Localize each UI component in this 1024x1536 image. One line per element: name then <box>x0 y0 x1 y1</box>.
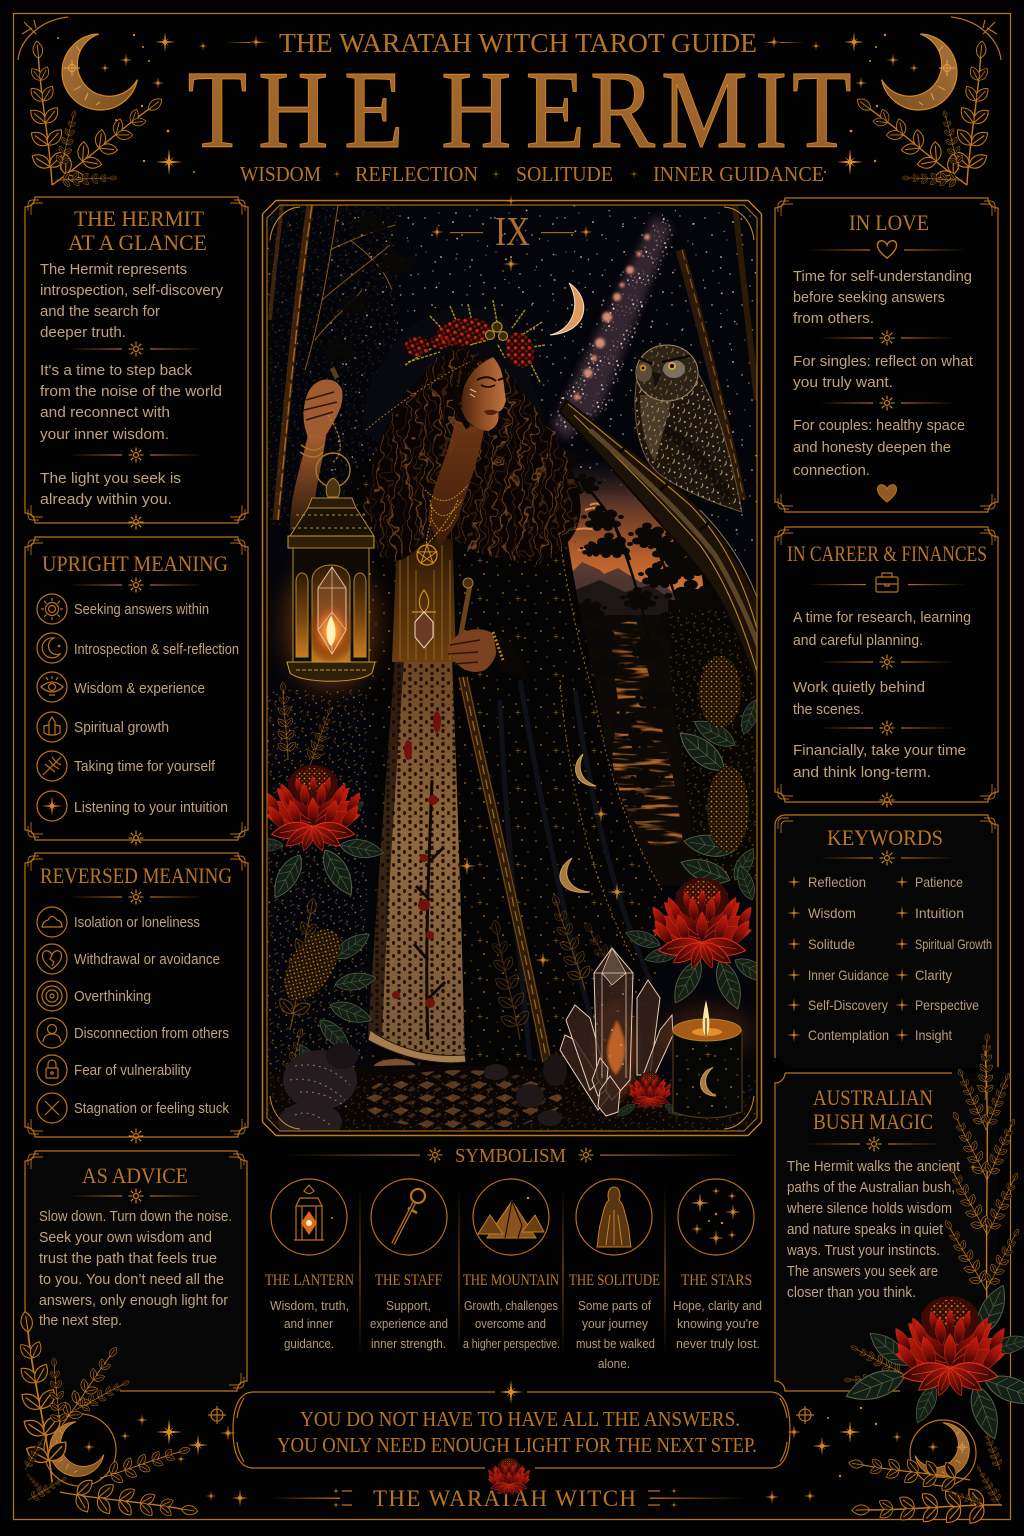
flower crown <box>405 300 545 382</box>
icon: briefcase <box>808 573 966 592</box>
icon: heart outline <box>808 241 966 258</box>
owl <box>633 345 742 512</box>
panel: in love <box>775 198 998 512</box>
body text <box>40 262 224 508</box>
symbol names <box>265 1272 752 1289</box>
lantern <box>285 453 377 689</box>
quote text: YOU ONLY NEED ENOUGH LIGHT FOR THE NEXT STEP. <box>277 1433 757 1457</box>
quote banner <box>233 1380 790 1468</box>
keyword list <box>787 874 992 1043</box>
keyword list: Reflection <box>808 874 866 890</box>
keyword tagline <box>240 162 824 186</box>
body text: and careful planning. <box>793 633 923 649</box>
distant mountains <box>572 562 678 615</box>
symbol descriptions: guidance. <box>284 1336 334 1351</box>
quote text: YOU DO NOT HAVE TO HAVE ALL THE ANSWERS. <box>300 1407 740 1431</box>
heading <box>813 1085 933 1134</box>
heading: THE HERMIT <box>74 206 205 231</box>
large corner waratah <box>842 1281 1024 1443</box>
icon: staff <box>371 1179 447 1255</box>
bush magic body text: ways. Trust your instincts. <box>786 1243 940 1259</box>
keyword list: Intuition <box>915 905 964 921</box>
heading: BUSH MAGIC <box>813 1109 933 1134</box>
foot and sandal <box>374 1059 421 1066</box>
body text: your inner wisdom. <box>40 427 169 443</box>
keyword tagline: SOLITUDE <box>516 162 613 186</box>
sunset sky <box>568 464 704 593</box>
keyword list: Perspective <box>915 997 979 1013</box>
card numeral: IX <box>495 208 530 254</box>
winding river path <box>612 620 684 850</box>
body text <box>39 1209 232 1329</box>
chest and neck <box>425 420 484 548</box>
icon: person <box>37 1018 67 1048</box>
symbol names: THE MOUNTAIN <box>463 1272 559 1289</box>
keyword tagline: INNER GUIDANCE <box>653 162 824 186</box>
symbol descriptions <box>270 1298 762 1371</box>
symbol descriptions: experience and <box>370 1316 448 1331</box>
body text: The light you seek is <box>40 471 181 487</box>
card numeral <box>430 208 592 272</box>
body text: Seek your own wisdom and <box>39 1230 212 1246</box>
symbol descriptions: Wisdom, truth, <box>270 1298 349 1313</box>
left forest trees <box>268 205 398 525</box>
small waratah <box>615 1072 685 1119</box>
body text <box>793 269 973 479</box>
hair front locks <box>385 360 576 561</box>
icon: broken heart <box>37 944 67 974</box>
reversed list: Stagnation or feeling stuck <box>74 1101 230 1117</box>
icon: eye <box>37 672 67 702</box>
sunset clouds <box>576 502 600 551</box>
body text <box>793 610 971 781</box>
symbol descriptions: Growth, challenges <box>464 1298 558 1313</box>
tarot card illustration <box>252 195 775 1142</box>
body text: from the noise of the world <box>40 384 222 400</box>
body text: It's a time to step back <box>40 363 193 379</box>
left golden foliage <box>268 682 367 1074</box>
body text: you truly want. <box>793 375 893 391</box>
main title: THE HERMIT <box>188 48 852 171</box>
face <box>454 355 506 431</box>
left waratah <box>268 765 384 898</box>
bottom right ornament <box>765 1406 1006 1531</box>
symbol names: THE STAFF <box>375 1272 442 1289</box>
forest floor <box>267 1065 757 1136</box>
right forest trees <box>680 205 757 500</box>
upright list: Wisdom & experience <box>74 681 205 697</box>
keyword tagline: REFLECTION <box>355 162 478 186</box>
bottom left ornament <box>1 1308 248 1531</box>
symbol descriptions: Hope, clarity and <box>673 1298 762 1313</box>
symbolism section <box>265 1145 762 1371</box>
body text: already within you. <box>40 492 172 508</box>
body text: For singles: reflect on what <box>793 354 973 370</box>
heading: UPRIGHT MEANING <box>42 551 228 576</box>
symbol descriptions: knowing you're <box>677 1316 759 1331</box>
top right ornament: moon and sprigs <box>812 17 1002 200</box>
keyword list: Wisdom <box>808 905 856 921</box>
panel: upright meaning <box>25 537 248 846</box>
icon: hooded figure <box>576 1179 652 1255</box>
rocks <box>278 1043 567 1130</box>
keyword list: Solitude <box>808 936 855 952</box>
cloak <box>352 430 663 1077</box>
body text: answers, only enough light for <box>39 1293 228 1309</box>
body text: before seeking answers <box>793 290 945 306</box>
header <box>188 27 852 186</box>
symbol descriptions: Some parts of <box>578 1298 651 1313</box>
body text: introspection, self-discovery <box>40 283 224 299</box>
brand name: THE WARATAH WITCH <box>373 1486 636 1511</box>
top left ornament: moon and sprigs <box>17 17 207 200</box>
gum tree silhouettes <box>570 454 705 808</box>
symbol descriptions: must be walked <box>576 1336 655 1351</box>
body text: Financially, take your time <box>793 743 966 759</box>
symbol descriptions: a higher perspective. <box>463 1336 560 1351</box>
hood trim <box>366 362 470 430</box>
body text: and think long-term. <box>793 765 931 781</box>
keyword tagline: WISDOM <box>240 162 321 186</box>
bush magic body text: paths of the Australian bush, <box>787 1180 955 1196</box>
upright list: Spiritual growth <box>74 720 169 736</box>
keyword list: Self-Discovery <box>808 997 888 1013</box>
raised arm and hand <box>290 368 343 530</box>
left banksia <box>284 929 376 1055</box>
right bush mass <box>668 600 757 885</box>
cloak moons and stars <box>460 754 626 1000</box>
icon: north star <box>37 791 67 821</box>
upright list: Seeking answers within <box>74 602 209 618</box>
body text: and honesty deepen the <box>793 440 951 456</box>
heading: KEYWORDS <box>827 825 943 850</box>
body text: For couples: healthy space <box>793 418 965 434</box>
icon: padlock <box>37 1055 67 1085</box>
bush magic body text <box>786 1159 960 1301</box>
heading: IN LOVE <box>849 210 929 235</box>
crystals <box>560 948 673 1116</box>
upright list: Taking time for yourself <box>74 759 216 775</box>
candle <box>663 1000 751 1118</box>
quote text <box>277 1407 757 1457</box>
staff <box>463 677 547 1062</box>
reversed list: Overthinking <box>74 989 151 1005</box>
keyword list: Spiritual Growth <box>915 936 992 952</box>
body text: Slow down. Turn down the noise. <box>39 1209 232 1225</box>
right banksias and leaves <box>680 656 756 900</box>
right waratah <box>626 878 756 1010</box>
bush magic body text: The Hermit walks the ancient <box>787 1159 960 1175</box>
upright list <box>74 602 239 816</box>
symbol descriptions: Support, <box>386 1298 431 1313</box>
heading <box>68 206 207 255</box>
small waratah emblem <box>487 1458 531 1496</box>
panel: at a glance <box>25 197 248 530</box>
bush magic body text: where silence holds wisdom <box>786 1201 952 1217</box>
upright list: Introspection & self-reflection <box>74 642 239 658</box>
heading: REVERSED MEANING <box>40 863 232 888</box>
keyword list: Patience <box>915 874 963 890</box>
left foliage <box>323 212 403 359</box>
body text: the next step. <box>39 1313 122 1329</box>
heading: AS ADVICE <box>82 1163 188 1188</box>
symbol names: THE LANTERN <box>265 1272 354 1289</box>
bush magic body text: closer than you think. <box>787 1285 916 1301</box>
symbol descriptions: your journey <box>582 1316 648 1331</box>
symbol descriptions: overcome and <box>475 1316 546 1331</box>
hood <box>362 310 528 436</box>
bush magic body text: The answers you seek are <box>787 1264 938 1280</box>
heading: SYMBOLISM <box>455 1145 566 1167</box>
icon: crescent <box>37 633 67 663</box>
dark bush valley <box>581 615 696 885</box>
symbol descriptions: and inner <box>284 1316 334 1331</box>
symbol descriptions: inner strength. <box>371 1336 446 1351</box>
body text: Work quietly behind <box>793 680 925 696</box>
body text: Time for self-understanding <box>793 269 972 285</box>
body text: and reconnect with <box>40 405 170 421</box>
icon: stars <box>678 1179 754 1255</box>
heading: AT A GLANCE <box>68 230 207 255</box>
keyword list: Inner Guidance <box>808 967 889 983</box>
heading: AUSTRALIAN <box>813 1085 933 1110</box>
panel: career and finances <box>775 527 998 808</box>
icon: sun <box>37 594 67 624</box>
reversed list: Isolation or loneliness <box>74 915 200 931</box>
icon: feather sprig <box>37 751 67 781</box>
body text: from others. <box>793 311 874 327</box>
card frame <box>262 195 762 1136</box>
brand sign-off <box>270 1458 745 1511</box>
night sky <box>262 200 762 1136</box>
bush magic body text: and nature speaks in quiet <box>787 1222 943 1238</box>
icon: filled heart <box>877 485 897 502</box>
icon: mountain <box>473 1179 549 1255</box>
keyword list: Insight <box>915 1027 952 1043</box>
panel: reversed meaning <box>25 853 248 1144</box>
reversed list: Fear of vulnerability <box>74 1063 192 1079</box>
symbol descriptions: alone. <box>598 1356 630 1371</box>
bush panel sprigs near waratah <box>844 1339 909 1389</box>
dress <box>368 515 466 1063</box>
symbol descriptions: never truly lost. <box>676 1336 760 1351</box>
header kicker: THE WARATAH WITCH TAROT GUIDE <box>279 27 757 58</box>
body text: connection. <box>793 463 870 479</box>
icon: lantern <box>271 1179 347 1255</box>
body text: the scenes. <box>793 702 864 718</box>
panel: as advice <box>25 1151 247 1391</box>
keyword list: Contemplation <box>808 1027 889 1043</box>
crescent moon <box>550 283 584 335</box>
body text: A time for research, learning <box>793 610 971 626</box>
header flourish <box>226 36 804 48</box>
reversed list: Disconnection from others <box>74 1026 229 1042</box>
reversed list: Withdrawal or avoidance <box>74 952 220 968</box>
icon: cross <box>37 1093 67 1123</box>
panel: keywords <box>775 815 998 1068</box>
keyword list: Clarity <box>915 967 952 983</box>
body text: to you. You don’t need all the <box>39 1272 224 1288</box>
body text: and the search for <box>40 304 160 320</box>
hand on staff <box>447 628 528 680</box>
upright list: Listening to your intuition <box>74 800 228 816</box>
body text: The Hermit represents <box>40 262 187 278</box>
body text: deeper truth. <box>40 325 126 341</box>
symbol names: THE SOLITUDE <box>569 1272 660 1289</box>
icon: spiral <box>37 981 67 1011</box>
body text: trust the path that feels true <box>39 1251 217 1267</box>
icon: crystal <box>37 712 67 742</box>
icon: isolation cloud <box>37 907 67 937</box>
hair back mass <box>366 345 581 561</box>
reversed list <box>74 915 230 1117</box>
milky way <box>548 212 675 445</box>
symbol names: THE STARS <box>681 1272 752 1289</box>
panel: australian bush magic <box>775 1073 998 1391</box>
necklace and pendants <box>412 500 458 648</box>
bush panel sprig <box>936 1033 1024 1305</box>
branch with owl perch <box>560 400 762 700</box>
